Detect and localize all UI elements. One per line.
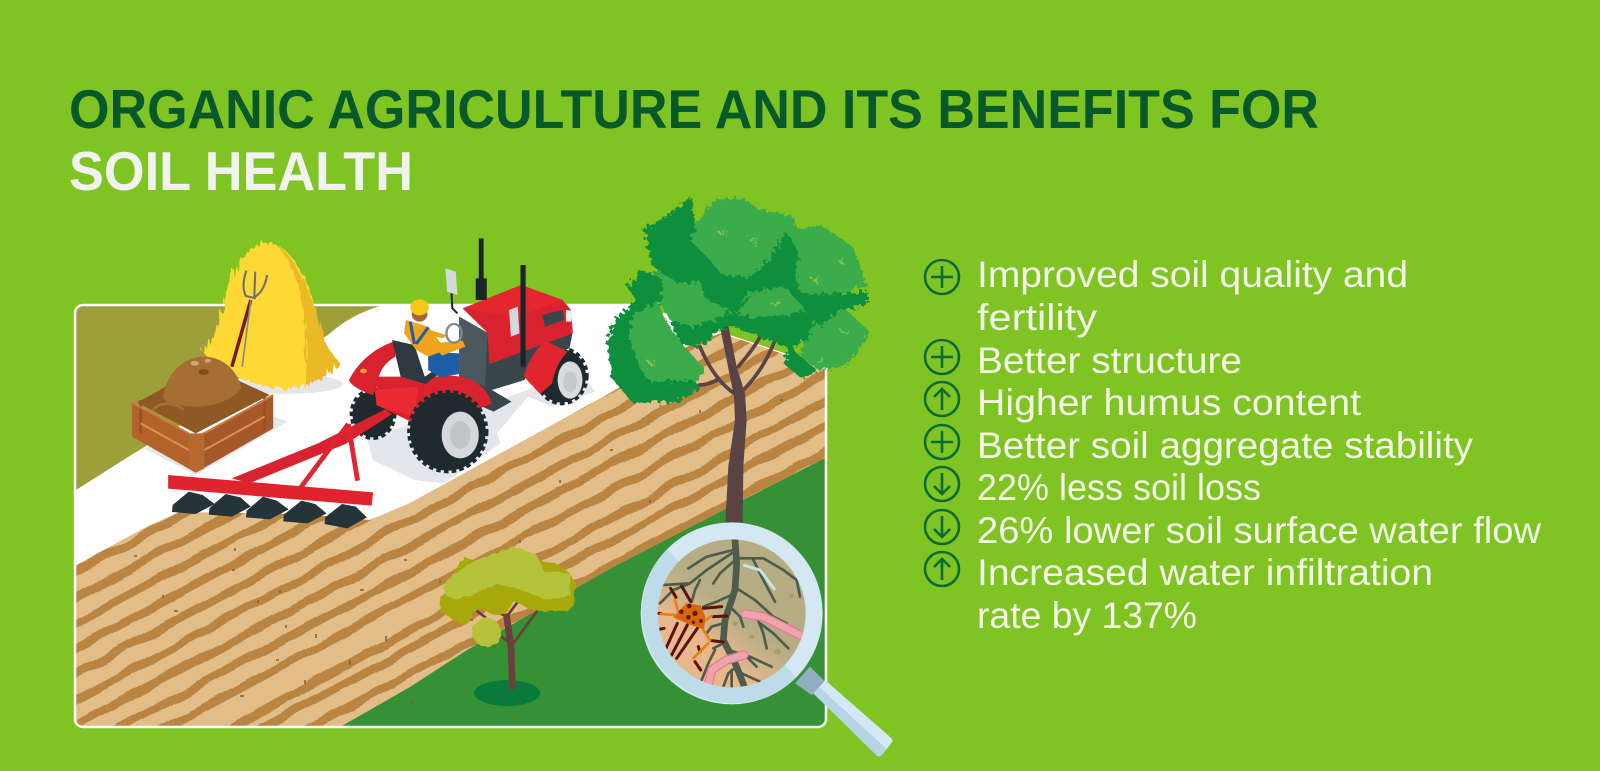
- trunk: [473, 597, 537, 687]
- plough shares: [172, 492, 367, 528]
- seat: [392, 340, 449, 384]
- icon: hay stack: [203, 243, 343, 394]
- rear body and fenders: [349, 342, 492, 428]
- plough bar: [168, 475, 373, 506]
- furrows: [76, 333, 825, 726]
- icon: large tree: [610, 200, 867, 523]
- benefit: lower surface water flow: 26% lower soil surface water flow: [977, 510, 1541, 551]
- title: SOIL HEALTH: [69, 140, 413, 202]
- title: ORGANIC AGRICULTURE AND ITS BENEFITS FOR: [69, 78, 1319, 140]
- near rear wheel: [410, 393, 486, 471]
- lens soil view: [657, 538, 807, 688]
- icon: up arrow: [925, 382, 959, 416]
- crown base: [650, 233, 820, 347]
- soil mound: [163, 357, 241, 406]
- tow hitch: [232, 409, 392, 483]
- benefit: water infiltration: rate by 137%: [977, 595, 1197, 636]
- icon: down arrow: [925, 510, 959, 544]
- soil specks: [134, 400, 783, 704]
- benefit: improved soil quality: fertility: [977, 297, 1098, 338]
- worms: [708, 614, 803, 685]
- front fender: [524, 342, 568, 394]
- foliage: [440, 547, 577, 647]
- icon: down arrow: [925, 467, 959, 501]
- hood: [463, 285, 573, 364]
- benefit: less soil loss: 22% less soil loss: [977, 467, 1261, 508]
- benefit: improved soil quality: [925, 254, 1408, 338]
- soil spots: [732, 594, 794, 654]
- benefit: water infiltration: Increased water infiltration: [977, 552, 1433, 593]
- benefit: higher humus: Higher humus content: [977, 382, 1362, 423]
- dark leaf masses: [610, 200, 867, 400]
- hay shadow: [227, 374, 343, 394]
- front right wheel: [538, 349, 586, 403]
- benefits list: [925, 254, 1541, 636]
- icon: up arrow: [925, 552, 959, 586]
- driver: [404, 299, 465, 377]
- plough frame: [301, 424, 358, 487]
- icon: compost box: [132, 357, 288, 475]
- exhaust pipes: [476, 238, 526, 367]
- panel: farm illustration: [74, 304, 828, 728]
- icon: plus: [925, 425, 959, 459]
- pitchfork: [232, 271, 267, 367]
- trunk and branches: [699, 325, 791, 523]
- cab console: [459, 317, 487, 387]
- icon: tractor with plough: [168, 238, 595, 528]
- water trace: [743, 565, 775, 590]
- leaf highlights: [648, 229, 848, 366]
- ploughed field: [76, 333, 825, 726]
- handle: [795, 667, 892, 756]
- light leaf masses: [630, 203, 865, 383]
- olive meadow: [76, 306, 380, 490]
- soil bed: [137, 365, 270, 433]
- far rear wheel: [352, 391, 394, 437]
- beetle: [658, 586, 727, 670]
- box walls: [132, 403, 196, 473]
- shadow: [474, 680, 540, 706]
- benefit: aggregate stability: Better soil aggregate stability: [977, 425, 1474, 466]
- title: [69, 78, 1319, 202]
- benefit: better structure: Better structure: [977, 340, 1242, 381]
- roots: [660, 540, 800, 688]
- farm ground: [76, 306, 825, 726]
- dark green grass: [330, 440, 825, 727]
- mirrors: [445, 268, 519, 337]
- icon: small tree: [440, 547, 577, 706]
- icon: plus: [925, 260, 959, 294]
- dark chassis: [459, 317, 573, 412]
- benefit: water infiltration: [925, 552, 1433, 636]
- box shadow: [144, 417, 288, 475]
- icon: magnifying glass: [641, 522, 892, 756]
- benefit: improved soil quality: Improved soil quality and: [977, 254, 1408, 295]
- tractor shadow: [366, 370, 595, 483]
- foliage: [610, 200, 867, 400]
- panel frame: [75, 305, 826, 727]
- icon: plus: [925, 340, 959, 374]
- frame outline: [75, 305, 826, 727]
- rim: [641, 522, 823, 704]
